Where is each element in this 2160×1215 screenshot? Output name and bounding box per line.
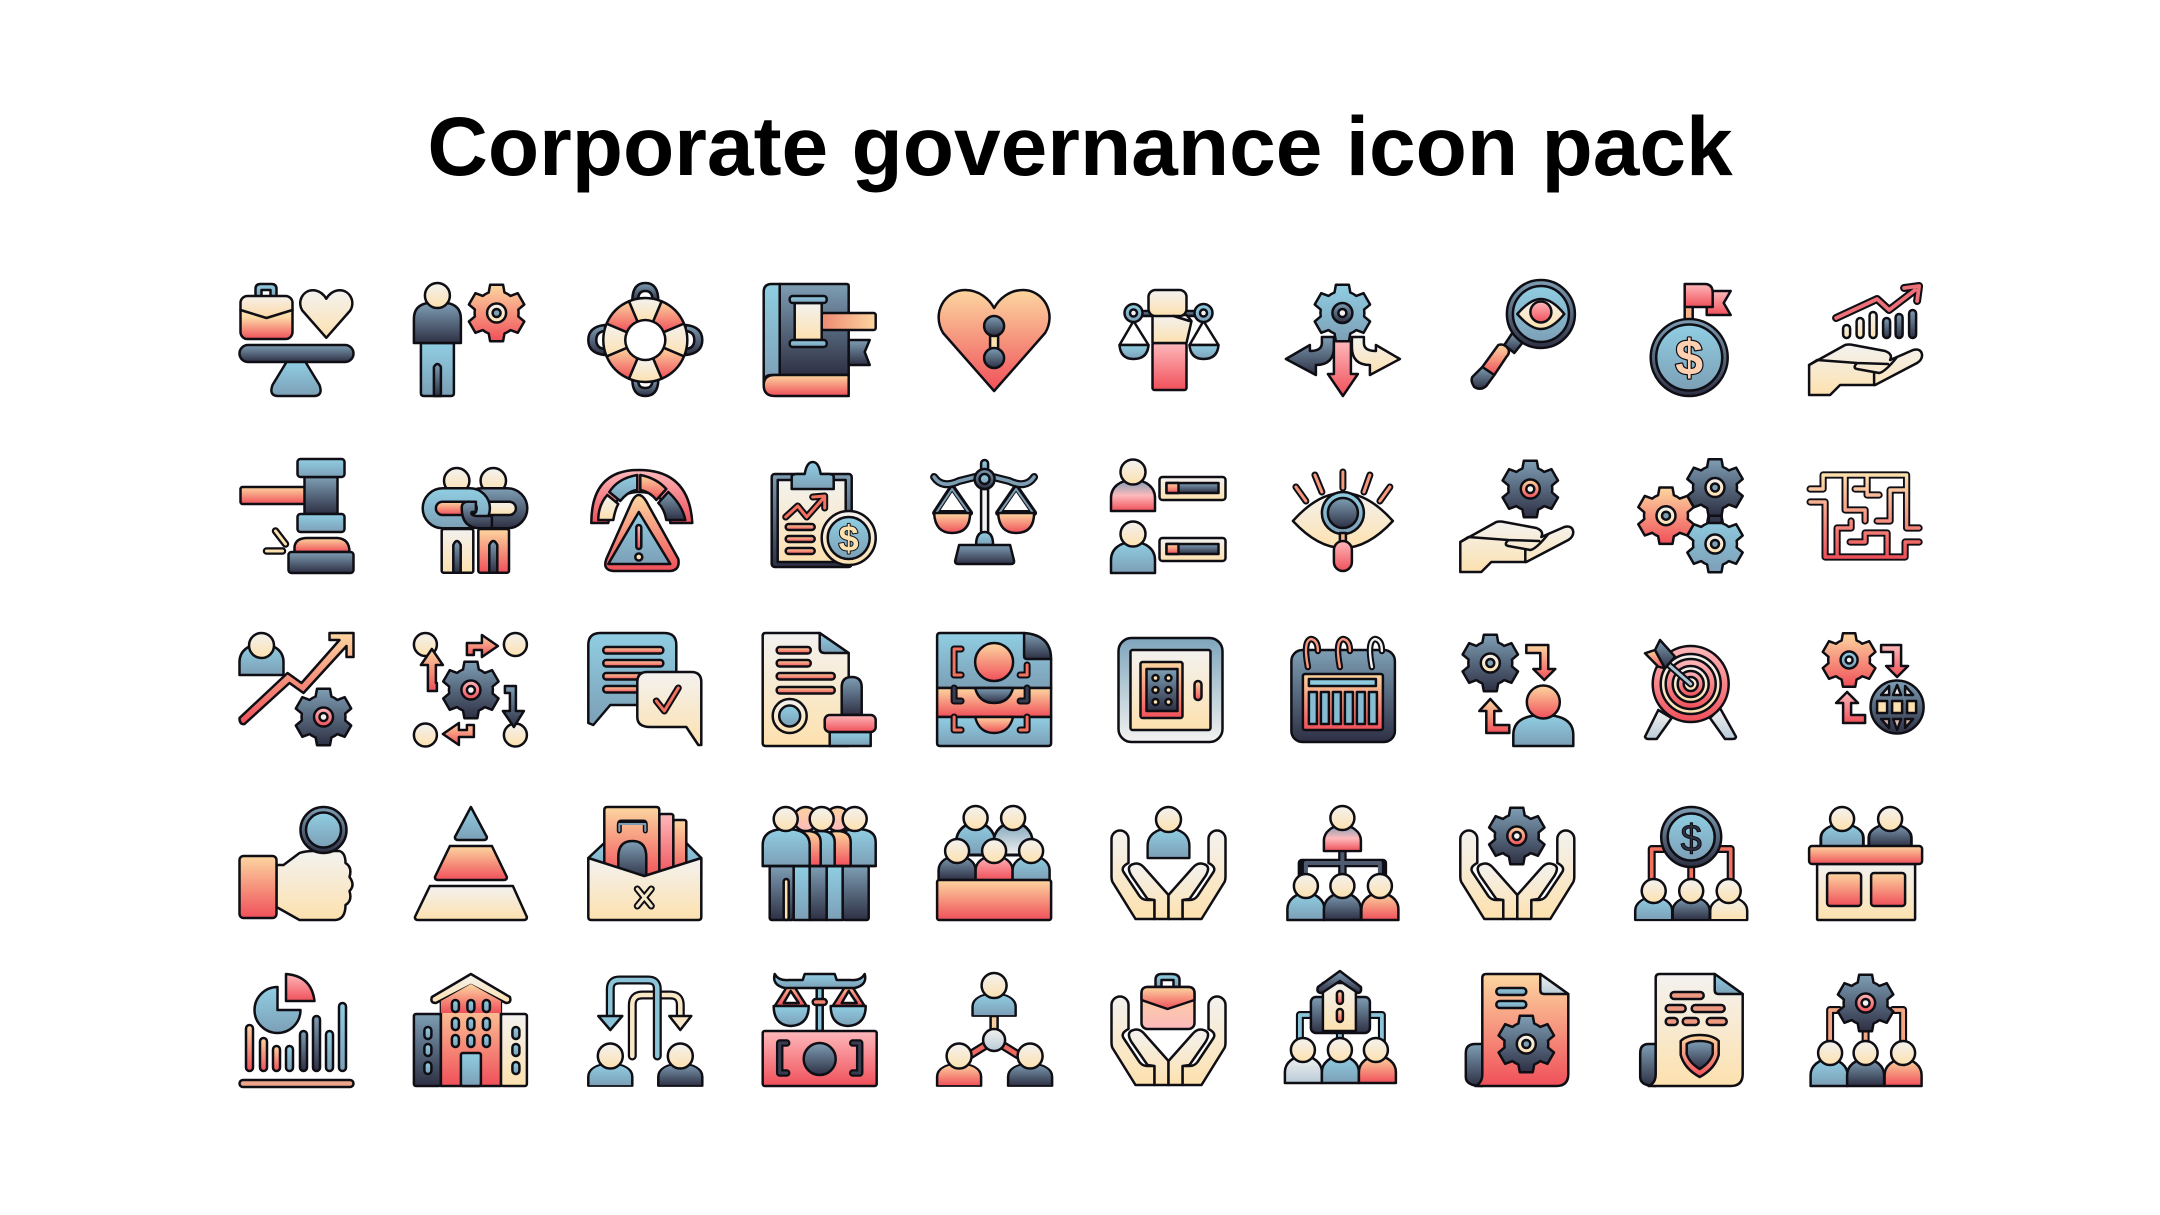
icon: money file: [937, 633, 1051, 746]
icon: gear surrounded by flow arrows: [414, 633, 527, 746]
icon: lifebuoy: [588, 283, 702, 396]
icon: calendar: [1291, 639, 1395, 742]
icon: pyramid: [415, 807, 527, 920]
icon: organisation hierarchy: [1287, 806, 1398, 920]
icon: gear and person exchange: [1463, 635, 1573, 746]
icon: three connected gears: [1638, 459, 1743, 572]
title: Corporate governance icon pack: [427, 99, 1733, 193]
icon: work-life balance: [240, 284, 354, 396]
icon: arrows between two people: [588, 980, 702, 1086]
icon: person with gear: [414, 283, 524, 396]
icon: corporate building: [414, 974, 527, 1086]
icon: safe: [1118, 638, 1222, 742]
icon: maze: [1810, 475, 1919, 557]
icon: board at counter: [1809, 807, 1922, 920]
icon: dollar coin with flag: $: [1675, 330, 1703, 386]
icon: envelope with profile cards: [588, 807, 701, 920]
icon: person, growth line and gear: [240, 633, 354, 745]
icon: charts and pie: [240, 974, 354, 1087]
icon: chat bubbles with check: [588, 633, 701, 745]
icon: magnifier with eye: [1472, 280, 1575, 389]
icon: eye with magnifier: [1293, 472, 1393, 571]
icon: archery target: [1645, 640, 1736, 739]
icon: scales of justice: [934, 460, 1034, 564]
icon grid: [240, 280, 1924, 1087]
icon: money shared to team: [1635, 807, 1747, 920]
icon: people with progress bars: [1111, 460, 1226, 573]
icon: group of people: [763, 807, 876, 920]
icon: financial report clipboard: [772, 462, 876, 567]
icon: hands holding briefcase: [1112, 974, 1226, 1085]
icon: gear over team: [1811, 975, 1922, 1086]
icon: risk gauge warning: [591, 470, 692, 571]
icon: document with stamp: [763, 633, 876, 746]
icon: team at table: [937, 806, 1051, 920]
icon: corporate house over team: [1285, 971, 1396, 1083]
icon: linked partners: [423, 468, 527, 573]
icon: gavel striking: [240, 459, 354, 573]
icon: scales over banknote: [763, 974, 877, 1086]
icon: law book with gavel: [764, 284, 876, 396]
icon: gear and globe exchange: [1823, 633, 1924, 734]
icon: hands protecting person: [1112, 807, 1226, 919]
icon: financial report clipboard: $: [839, 518, 859, 559]
icon: policy document with shield: [1640, 974, 1743, 1086]
icon: money shared to team: $: [1681, 818, 1702, 860]
icon: gear with three direction arrows: [1286, 285, 1400, 396]
icon: hand holding gear: [1460, 461, 1573, 572]
icon: network of people: [937, 973, 1052, 1086]
icon: hand holding scales: [1120, 290, 1218, 390]
icon: heart with keyhole: [939, 290, 1050, 391]
icon: policy document with gear: [1466, 974, 1568, 1086]
icon: hands protecting gear: [1460, 808, 1574, 919]
icon: hand holding growth chart: [1809, 286, 1922, 395]
icon: hand holding magnifier: [240, 807, 352, 920]
icon: dollar coin with flag: [1651, 284, 1731, 396]
